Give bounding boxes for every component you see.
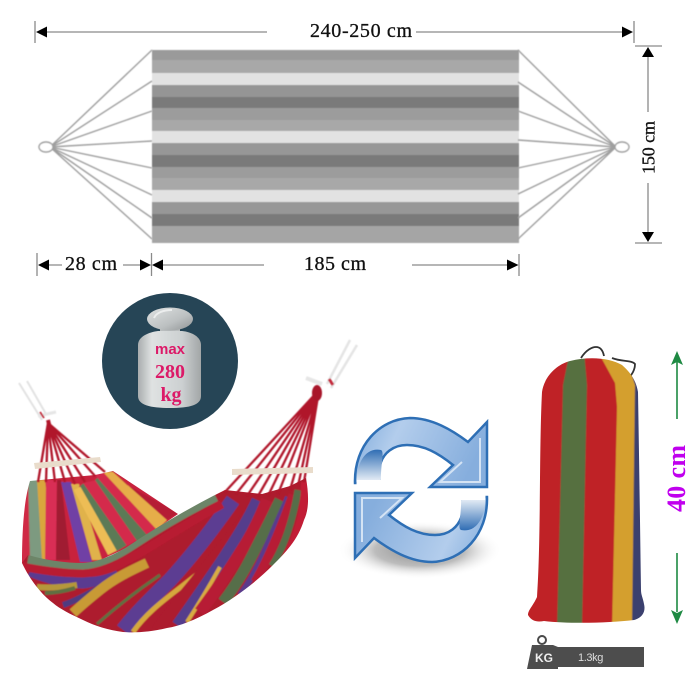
- left spreader bar: [34, 457, 101, 469]
- right ropes and loop: [518, 50, 629, 239]
- icon: max load weight 280 kg: [102, 293, 238, 429]
- dimension: total length 240-250 cm: 240-250 cm: [310, 20, 412, 42]
- dimension: width 150 cm: 150 cm: [638, 121, 658, 174]
- carrying bag: [525, 347, 650, 630]
- bag stripes: [528, 358, 644, 623]
- left suspension ropes: [38, 420, 105, 484]
- dimension: fabric length 185 cm: 185 cm: [304, 253, 366, 275]
- hammock photo illustration: [15, 340, 357, 640]
- panel: hammock dimension diagram: [35, 20, 662, 276]
- icon: max load weight 280 kg: 280: [155, 361, 185, 383]
- hanging cords: [19, 340, 357, 420]
- weight tag 1.3kg: 1.3kg: [578, 652, 603, 664]
- icon: convert arrows: [338, 418, 502, 579]
- dimension: bag height 40 cm: 40 cm: [662, 445, 691, 512]
- weight tag 1.3kg: KG: [535, 651, 553, 665]
- front panel stripes: [22, 478, 308, 632]
- dimension: width 150 cm: [635, 46, 662, 243]
- back panel stripes: [22, 471, 178, 563]
- dimension: bag height 40 cm: [662, 351, 691, 624]
- bottom arrow: [355, 493, 487, 562]
- top arrow: [355, 418, 487, 487]
- dimension: total length 240-250 cm: [35, 20, 634, 43]
- right suspension ropes: [225, 385, 322, 496]
- hammock fabric stripes: [152, 50, 519, 243]
- left ropes and loop: [39, 50, 152, 239]
- right spreader bar: [232, 467, 313, 475]
- dimension: fabric length 185 cm: [152, 253, 519, 276]
- dimension: rope length 28 cm: 28 cm: [65, 253, 117, 275]
- icon: max load weight 280 kg: kg: [160, 384, 182, 406]
- icon: max load weight 280 kg: max: [155, 341, 186, 358]
- dimension: rope length 28 cm: [37, 253, 152, 276]
- drawstrings: [581, 347, 635, 378]
- weight tag 1.3kg: [527, 636, 644, 669]
